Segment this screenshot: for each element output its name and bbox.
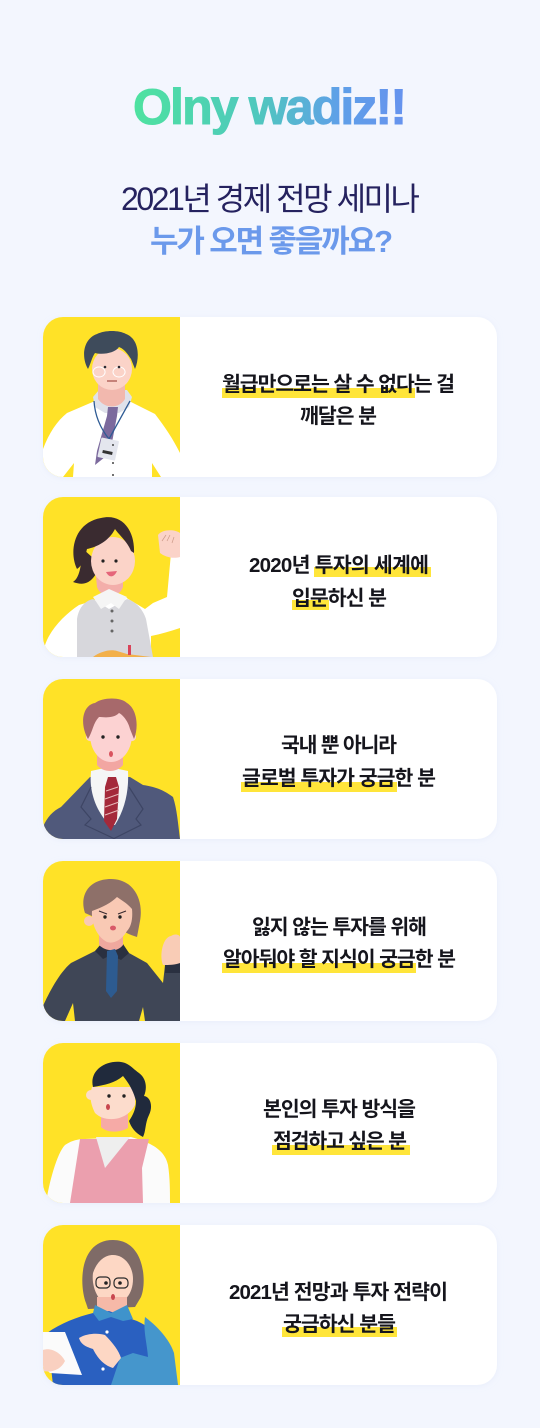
highlight	[222, 963, 416, 973]
card text	[263, 1098, 416, 1153]
card text: 깨달은 분	[300, 405, 377, 428]
highlight	[272, 1145, 410, 1155]
card 6	[43, 1225, 497, 1385]
card text	[249, 554, 429, 610]
card text: 월급만으로는 살 수 없다는 걸	[222, 373, 455, 396]
card text: 입문하신 분	[292, 587, 387, 610]
illustration: woman with glasses and paper	[43, 1225, 180, 1385]
infographic canvas	[43, 87, 497, 1385]
card text: 글로벌 투자가 궁금한 분	[242, 767, 436, 790]
card 4	[43, 861, 497, 1021]
card text	[222, 373, 455, 428]
illustration: woman with raised fist	[43, 497, 180, 657]
illustration: man in suit	[43, 679, 180, 839]
card text: 2020년 투자의 세계에	[249, 554, 429, 577]
illustration: woman in dark suit	[43, 861, 180, 1021]
card text: 알아둬야 할 지식이 궁금한 분	[223, 948, 456, 971]
card 3	[43, 679, 497, 839]
highlight	[282, 1327, 397, 1337]
illustration: man with lanyard	[43, 317, 180, 477]
card text: 본인의 투자 방식을	[263, 1098, 416, 1121]
title: Olny wadiz!!	[133, 79, 407, 135]
subtitle line 1: 2021년 경제 전망 세미나	[121, 181, 420, 217]
card 5	[43, 1043, 497, 1203]
highlight	[292, 600, 329, 610]
highlight	[222, 388, 415, 398]
card 1	[43, 317, 497, 477]
card text	[242, 734, 436, 790]
card text	[229, 1281, 448, 1336]
card text: 점검하고 싶은 분	[273, 1130, 407, 1153]
highlight	[241, 782, 397, 792]
card text	[223, 916, 456, 971]
subtitle line 2: 누가 오면 좋을까요?	[150, 224, 393, 259]
illustration: woman in pink vest	[43, 1043, 180, 1203]
card 2	[43, 497, 497, 657]
highlight	[314, 567, 431, 577]
card text: 잃지 않는 투자를 위해	[252, 916, 427, 939]
card text: 2021년 전망과 투자 전략이	[229, 1281, 448, 1304]
card text: 국내 뿐 아니라	[281, 734, 397, 757]
card text: 궁금하신 분들	[283, 1313, 396, 1336]
